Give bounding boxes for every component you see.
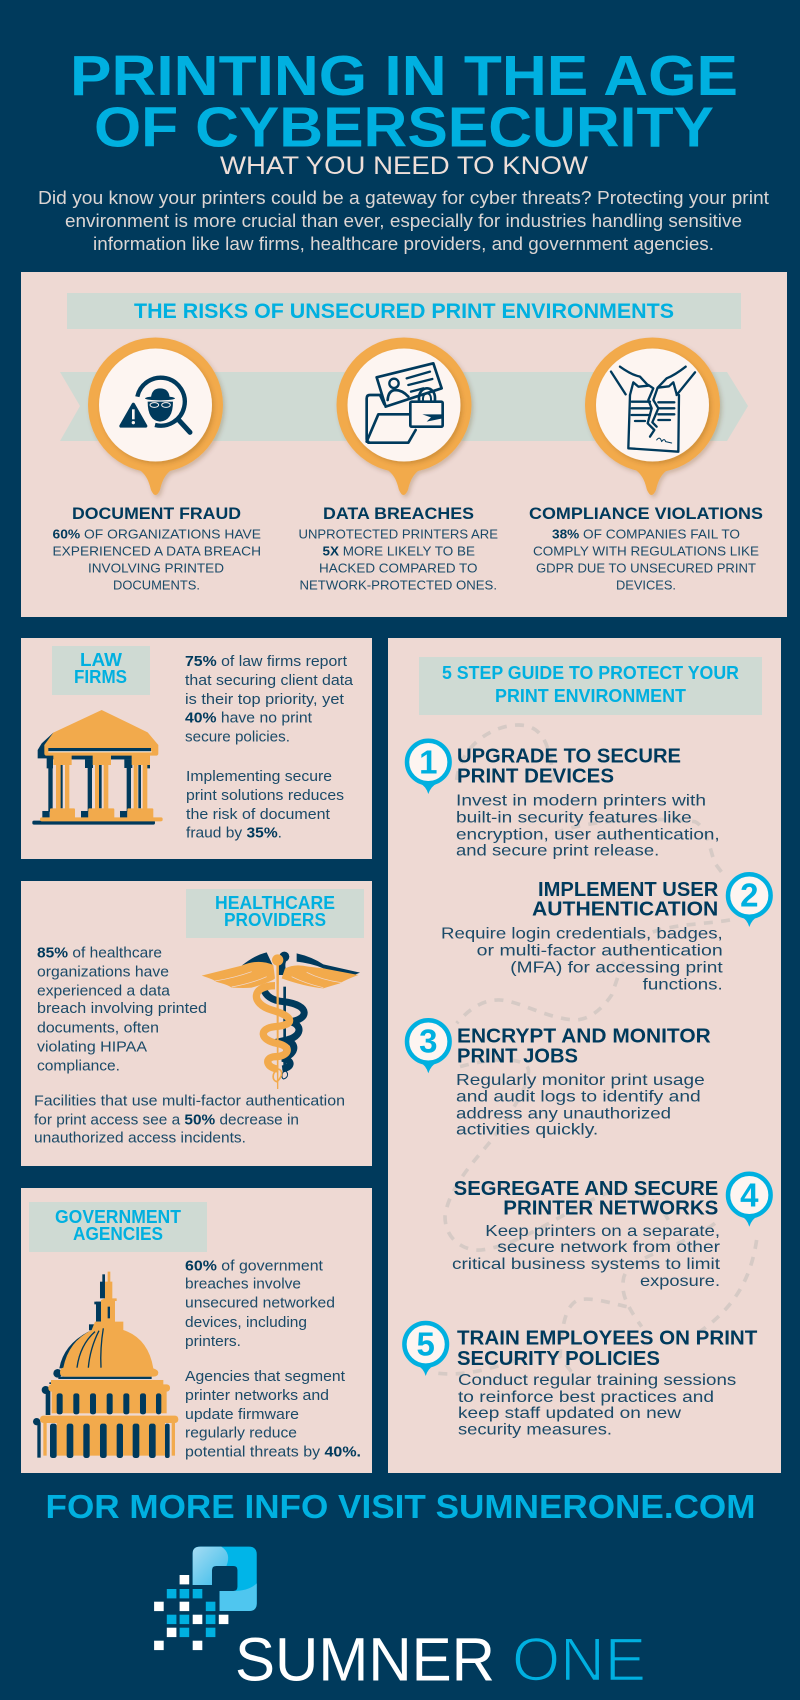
step 2: (MFA) for accessing print <box>510 959 723 976</box>
text block: law firms stats: print solutions reduces <box>186 788 344 804</box>
text block: government stats: breaches involve <box>185 1277 301 1293</box>
step 3: address any unauthorized <box>456 1105 671 1122</box>
text block: compliance violations <box>529 504 763 592</box>
step 5 <box>404 1323 757 1439</box>
heading: government agencies: GOVERNMENT <box>55 1207 181 1227</box>
heading: government agencies: AGENCIES <box>73 1224 163 1244</box>
call to action: FOR MORE INFO VISIT SUMNERONE.COM <box>46 1488 756 1525</box>
icon: number pin 2 <box>728 874 771 927</box>
step 5: TRAIN EMPLOYEES ON PRINT <box>457 1328 757 1350</box>
icon: number pin 3 <box>407 1020 450 1073</box>
text block: data breaches: DATA BREACHES <box>323 504 474 523</box>
text block: compliance violations: COMPLIANCE VIOLATIONS <box>529 504 763 523</box>
text block: data breaches <box>298 504 498 592</box>
text block: law firms stats: 40% have no print <box>185 710 312 726</box>
text block: law firms stats: secure policies. <box>185 730 290 746</box>
text block: law firms stats: that securing client data <box>185 673 354 689</box>
step 1: Invest in modern printers with <box>456 792 706 809</box>
text block: law firms stats: Implementing secure <box>186 769 332 785</box>
intro paragraph <box>38 188 769 254</box>
text block: healthcare stats: 85% of healthcare <box>37 946 162 962</box>
step 4: critical business systems to limit <box>452 1256 721 1273</box>
heading: 5 step guide: 5 STEP GUIDE TO PROTECT YOUR <box>442 663 739 683</box>
step 4: exposure. <box>640 1273 720 1290</box>
step 1: UPGRADE TO SECURE <box>457 745 681 767</box>
text block: government stats: printer networks and <box>185 1388 329 1404</box>
icon: logo mark <box>154 1547 257 1650</box>
panel: law firms <box>21 638 372 859</box>
logo: SumnerOne <box>154 1547 646 1694</box>
heading: government agencies <box>29 1202 207 1252</box>
panel: 5 step guide <box>388 638 781 1473</box>
text block: healthcare stats: Facilities that use multi-factor authentication <box>34 1094 345 1110</box>
step 2 <box>441 874 771 993</box>
text block: government stats: update firmware <box>185 1407 299 1423</box>
icon: folder, ID card and broken lock <box>367 363 443 443</box>
heading: law firms <box>52 646 150 695</box>
icon: number pin 2: 2 <box>740 876 758 914</box>
intro paragraph: Did you know your printers could be a gateway for cyber threats? Protecting your print <box>38 188 769 208</box>
step 1: built-in security features like <box>456 809 692 826</box>
heading: 5 step guide: PRINT ENVIRONMENT <box>495 686 686 706</box>
intro paragraph: information like law firms, healthcare providers, and government agencies. <box>93 234 714 254</box>
icon: caduceus <box>202 952 360 1089</box>
text block: law firms stats <box>185 654 354 842</box>
heading: healthcare providers: PROVIDERS <box>224 910 326 930</box>
icon: number pin 1: 1 <box>419 744 437 780</box>
step 5: security measures. <box>458 1422 612 1439</box>
text block: government stats: Agencies that segment <box>185 1369 345 1385</box>
text block: law firms stats: fraud by 35%. <box>186 826 282 842</box>
step 1: encryption, user authentication, <box>456 826 720 843</box>
text block: law firms stats: the risk of document <box>186 807 330 823</box>
step 3: ENCRYPT AND MONITOR <box>457 1025 711 1047</box>
step 4: PRINTER NETWORKS <box>503 1198 718 1220</box>
dashed route connecting steps <box>438 725 757 1377</box>
text block: government stats: 60% of government <box>185 1259 323 1275</box>
heading band: risks <box>67 293 741 329</box>
panel: healthcare providers <box>21 881 372 1166</box>
text block: document fraud: DOCUMENTS. <box>113 578 200 592</box>
icon: number pin 5 <box>404 1323 447 1376</box>
text block: compliance violations: GDPR DUE TO UNSECURED PRINT <box>536 560 756 576</box>
text block: government stats: unsecured networked <box>185 1296 335 1312</box>
heading: 5 step guide <box>419 657 762 715</box>
title: PRINTING IN THE AGE <box>70 44 738 108</box>
wordmark: SUMNER <box>235 1626 495 1694</box>
text block: law firms stats: 75% of law firms report <box>185 654 347 670</box>
step 3 <box>407 1020 711 1139</box>
icon: number pin 3: 3 <box>419 1022 437 1060</box>
icon: courthouse <box>32 710 163 825</box>
step 5: keep staff updated on new <box>458 1405 682 1422</box>
text block: healthcare stats: compliance. <box>37 1058 120 1074</box>
text block: data breaches: HACKED COMPARED TO <box>319 560 478 576</box>
step 4: SEGREGATE AND SECURE <box>454 1178 718 1200</box>
step 5: SECURITY POLICIES <box>457 1348 660 1370</box>
icon: number pin 5: 5 <box>417 1326 435 1362</box>
wordmark <box>235 1626 646 1694</box>
text block: government stats <box>185 1259 361 1461</box>
wordmark: ONE <box>512 1626 646 1694</box>
heading: law firms: FIRMS <box>74 667 127 687</box>
subtitle: WHAT YOU NEED TO KNOW <box>220 152 588 180</box>
step 2: IMPLEMENT USER <box>538 879 719 901</box>
panel: risks of unsecured print environments <box>21 272 787 617</box>
step 4: Keep printers on a separate, <box>485 1223 720 1240</box>
pin: document fraud <box>88 338 223 495</box>
step 2: AUTHENTICATION <box>532 899 718 921</box>
text block: healthcare stats: violating HIPAA <box>37 1039 147 1055</box>
text block: healthcare stats: for print access see a 50% decrease in <box>34 1113 299 1129</box>
text block: compliance violations: COMPLY WITH REGULATIONS LIKE <box>533 544 759 558</box>
text block: government stats: printers. <box>185 1334 241 1350</box>
step 4: secure network from other <box>497 1239 721 1256</box>
text block: government stats: potential threats by 40%. <box>185 1445 361 1461</box>
step 2: Require login credentials, badges, <box>441 925 723 942</box>
ribbon arrow <box>60 372 748 441</box>
step 2: or multi-factor authentication <box>477 942 723 959</box>
text block: healthcare stats: unauthorized access incidents. <box>34 1130 246 1146</box>
pin: data breaches <box>336 338 472 495</box>
text block: compliance violations: 38% OF COMPANIES FAIL TO <box>552 526 740 542</box>
step 5: Conduct regular training sessions <box>458 1372 736 1389</box>
icon: capitol dome <box>33 1272 178 1458</box>
pin: compliance violations <box>585 338 720 495</box>
panel: government agencies <box>21 1188 372 1473</box>
text block: compliance violations: DEVICES. <box>616 578 676 592</box>
heading band: risks: THE RISKS OF UNSECURED PRINT ENVIRONMENTS <box>134 300 674 323</box>
step 3: PRINT JOBS <box>457 1045 578 1067</box>
text block: data breaches: NETWORK-PROTECTED ONES. <box>300 578 497 592</box>
text block: document fraud: DOCUMENT FRAUD <box>72 504 241 523</box>
text block: healthcare stats: breach involving printed <box>37 1001 207 1017</box>
text block: healthcare stats <box>34 946 345 1146</box>
step 2: functions. <box>643 976 723 993</box>
text block: healthcare stats: organizations have <box>37 964 169 980</box>
text block: document fraud <box>52 504 261 592</box>
icon: number pin 1 <box>407 741 450 794</box>
step 5: to reinforce best practices and <box>458 1389 714 1406</box>
text block: document fraud: INVOLVING PRINTED <box>88 560 224 576</box>
text block: healthcare stats: experienced a data <box>37 983 171 999</box>
text block: document fraud: 60% OF ORGANIZATIONS HAVE <box>52 526 261 542</box>
text block: data breaches: UNPROTECTED PRINTERS ARE <box>298 526 498 542</box>
step 3: Regularly monitor print usage <box>456 1072 705 1089</box>
text block: document fraud: EXPERIENCED A DATA BREACH <box>52 544 261 558</box>
heading: law firms: LAW <box>80 650 122 670</box>
title <box>70 44 738 160</box>
heading: healthcare providers: HEALTHCARE <box>215 893 335 913</box>
text block: government stats: devices, including <box>185 1315 307 1331</box>
icon: spy in magnifier with warning triangle <box>121 378 190 432</box>
text block: law firms stats: is their top priority, yet <box>185 692 344 708</box>
text block: healthcare stats: documents, often <box>37 1020 159 1036</box>
step 1: and secure print release. <box>456 842 659 859</box>
step 3: and audit logs to identify and <box>456 1088 701 1105</box>
text block: government stats: regularly reduce <box>185 1426 297 1442</box>
title: OF CYBERSECURITY <box>94 96 714 160</box>
icon: number pin 4 <box>728 1174 771 1227</box>
icon: number pin 4: 4 <box>740 1176 759 1214</box>
step 4 <box>452 1174 771 1290</box>
text block: data breaches: 5X MORE LIKELY TO BE <box>322 544 475 558</box>
step 1: PRINT DEVICES <box>457 765 614 787</box>
step 1 <box>407 741 720 859</box>
icon: torn document held by hands <box>611 367 695 452</box>
step 3: activities quickly. <box>456 1122 598 1139</box>
intro paragraph: environment is more crucial than ever, especially for industries handling sensitive <box>65 211 742 231</box>
heading: healthcare providers <box>186 889 364 938</box>
